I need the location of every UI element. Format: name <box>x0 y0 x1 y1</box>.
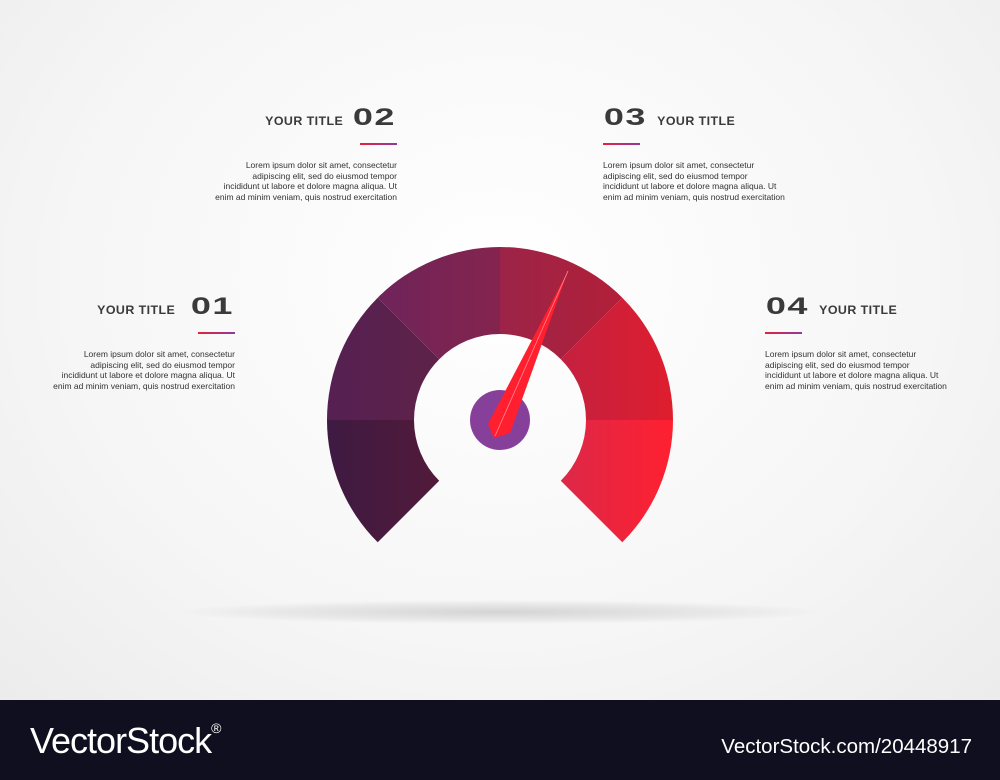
paragraph 03 <box>603 160 785 202</box>
segment 1 <box>327 420 439 542</box>
shadow under gauge <box>180 600 820 624</box>
heading 02: YOUR TITLE <box>265 116 343 128</box>
paragraph 02: adipiscing elit, sed do eiusmod tempor <box>252 171 397 181</box>
heading 03: 03 <box>604 104 647 131</box>
heading 01 <box>97 293 234 320</box>
paragraph 02: incididunt ut labore et dolore magna aliqua. Ut <box>224 181 397 191</box>
heading 01: YOUR TITLE <box>97 305 175 317</box>
heading 03 <box>604 104 735 131</box>
paragraph 02: Lorem ipsum dolor sit amet, consectetur <box>246 160 397 170</box>
paragraph 01: adipiscing elit, sed do eiusmod tempor <box>90 360 235 370</box>
paragraph 02 <box>215 160 397 202</box>
paragraph 01 <box>53 349 235 391</box>
paragraph 03: adipiscing elit, sed do eiusmod tempor <box>603 171 748 181</box>
text block 04 <box>765 293 947 391</box>
paragraph 04: adipiscing elit, sed do eiusmod tempor <box>765 360 910 370</box>
paragraph 04 <box>765 349 947 391</box>
segment 5 <box>561 298 673 420</box>
heading 04 <box>766 293 897 320</box>
paragraph 01: incididunt ut labore et dolore magna aliqua. Ut <box>62 370 235 380</box>
segment 4 <box>500 247 622 359</box>
heading 02: 02 <box>353 104 396 131</box>
text block 01 <box>53 293 235 391</box>
segment 6 <box>561 420 673 542</box>
text block 03 <box>603 104 785 202</box>
paragraph 01: Lorem ipsum dolor sit amet, consectetur <box>84 349 235 359</box>
text block 02 <box>215 104 397 202</box>
paragraph 03: enim ad minim veniam, quis nostrud exercitation <box>603 192 785 202</box>
needle <box>488 271 568 438</box>
paragraph 04: enim ad minim veniam, quis nostrud exercitation <box>765 381 947 391</box>
heading 03: YOUR TITLE <box>657 116 735 128</box>
footer bar <box>0 700 1000 780</box>
paragraph 02: enim ad minim veniam, quis nostrud exercitation <box>215 192 397 202</box>
paragraph 04: incididunt ut labore et dolore magna aliqua. Ut <box>765 370 938 380</box>
heading 04: 04 <box>766 293 809 320</box>
gauge hub <box>470 390 530 450</box>
heading 01: 01 <box>191 293 234 320</box>
paragraph 04: Lorem ipsum dolor sit amet, consectetur <box>765 349 916 359</box>
segment 3 <box>378 247 500 359</box>
footer url: VectorStock.com/20448917 <box>721 735 972 758</box>
heading 04: YOUR TITLE <box>819 305 897 317</box>
paragraph 01: enim ad minim veniam, quis nostrud exercitation <box>53 381 235 391</box>
paragraph 03: Lorem ipsum dolor sit amet, consectetur <box>603 160 754 170</box>
paragraph 03: incididunt ut labore et dolore magna aliqua. Ut <box>603 181 776 191</box>
segment 2 <box>327 298 439 420</box>
heading 02 <box>265 104 396 131</box>
footer logo: VectorStock® <box>30 720 220 761</box>
